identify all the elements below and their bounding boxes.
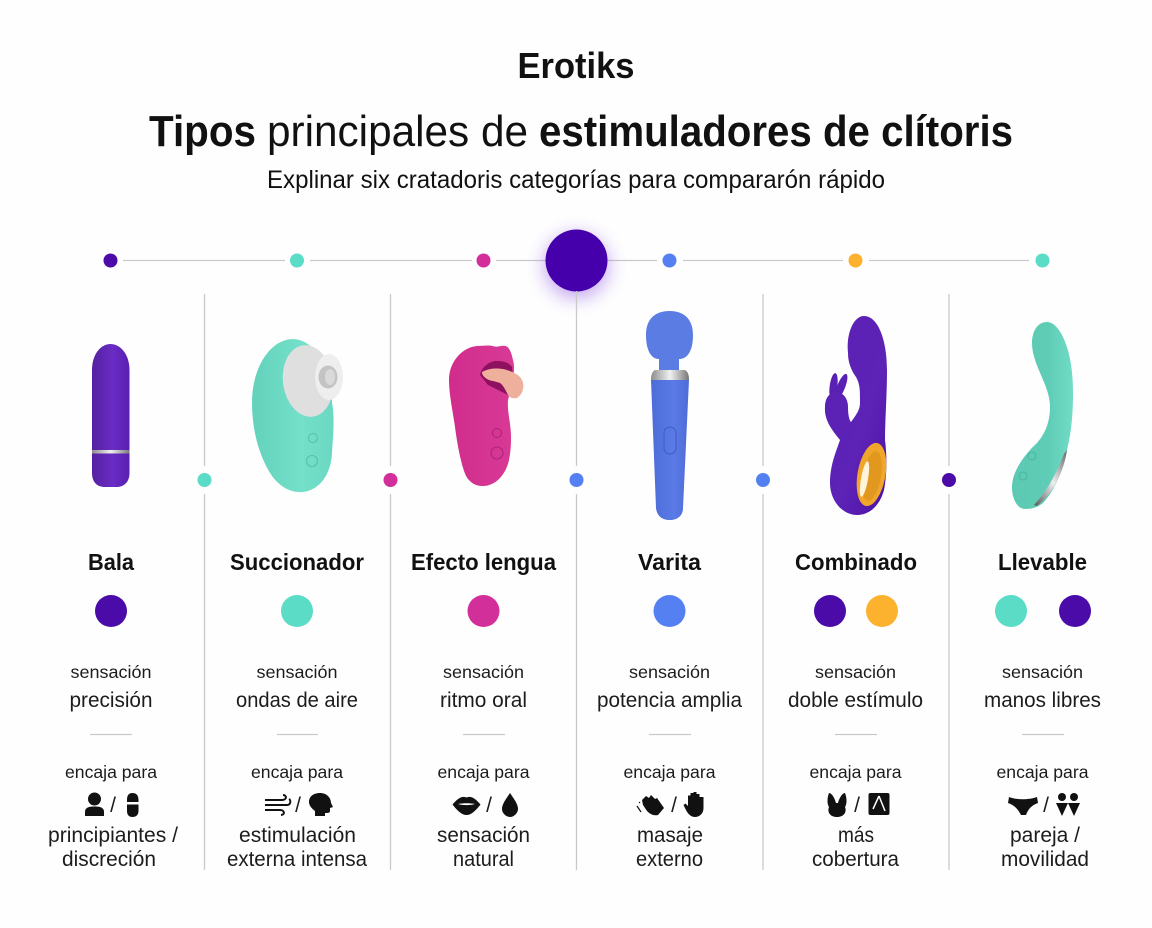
main heading: estimuladores de clítoris	[539, 107, 1013, 156]
main heading: principales de	[267, 107, 528, 156]
column dividers	[198, 291, 956, 870]
fit: más	[838, 824, 874, 847]
icon: underwear	[1008, 797, 1038, 815]
fit: discreción	[62, 848, 156, 871]
colour swatch	[468, 595, 500, 627]
fit: /	[1043, 794, 1049, 817]
product: wand	[646, 311, 693, 520]
column: Varita	[597, 549, 742, 871]
name: Combinado	[795, 549, 917, 575]
colour swatch	[654, 595, 686, 627]
icon: leaf	[502, 793, 518, 817]
fit	[227, 762, 367, 871]
sensation: precisión	[70, 689, 152, 712]
icon: bunny	[828, 793, 846, 817]
fit: principiantes /	[48, 824, 178, 847]
sensation: sensación	[70, 662, 152, 682]
fit: cobertura	[812, 848, 899, 871]
column: Bala	[48, 549, 178, 871]
fit: sensación	[437, 824, 530, 847]
sensation: manos libres	[984, 689, 1101, 712]
name: Efecto lengua	[411, 549, 557, 575]
fit: estimulación	[239, 824, 356, 847]
sensation: sensación	[443, 662, 524, 682]
icon: open hand	[684, 792, 704, 817]
fit: /	[110, 794, 116, 817]
fit: masaje	[637, 824, 703, 847]
fit: externo	[636, 848, 703, 871]
fit: encaja para	[996, 762, 1089, 782]
sensation	[597, 662, 742, 712]
fit	[624, 762, 716, 871]
product: bullet	[92, 344, 130, 487]
sensation	[236, 662, 358, 712]
colour swatch	[281, 595, 313, 627]
product: rabbit	[825, 316, 891, 515]
sensation	[440, 662, 527, 712]
column: Llevable	[984, 549, 1101, 871]
sensation	[788, 662, 923, 712]
fit	[996, 762, 1089, 871]
column: Succionador	[227, 549, 367, 871]
icon: bullet	[127, 793, 138, 817]
icon: square glyph	[868, 793, 890, 815]
colour swatches	[995, 595, 1091, 627]
icon: lips	[452, 797, 480, 815]
fit	[810, 762, 902, 871]
fit: natural	[453, 848, 514, 871]
active marker	[544, 230, 608, 298]
sensation	[984, 662, 1101, 712]
fit: /	[854, 794, 860, 817]
timeline	[104, 230, 1050, 298]
colour swatches	[814, 595, 898, 627]
fit: encaja para	[810, 762, 902, 782]
sensation: sensación	[629, 662, 710, 682]
fit: encaja para	[65, 762, 157, 782]
name: Bala	[88, 549, 135, 575]
fit: encaja para	[251, 762, 343, 782]
name: Succionador	[230, 549, 364, 575]
main heading	[149, 107, 1013, 156]
subtitle: Explinar six cratadoris categorías para compararón rápido	[267, 166, 885, 194]
icon: couple	[1056, 793, 1080, 816]
name: Varita	[638, 549, 702, 575]
fit: encaja para	[624, 762, 716, 782]
fit: encaja para	[438, 762, 530, 782]
column: Efecto lengua	[411, 549, 557, 871]
main heading: Tipos	[149, 107, 256, 156]
fit: externa intensa	[227, 848, 367, 871]
sensation: ritmo oral	[440, 689, 527, 712]
product: wearable	[1012, 322, 1073, 509]
fit: movilidad	[1001, 848, 1089, 871]
sensation: ondas de aire	[236, 689, 358, 712]
sensation: doble estímulo	[788, 689, 923, 712]
fit	[48, 762, 178, 871]
fit	[437, 762, 530, 871]
fit: /	[671, 794, 677, 817]
fit: /	[486, 794, 492, 817]
fit: /	[295, 794, 301, 817]
sensation	[70, 662, 152, 712]
icon: wind	[265, 795, 290, 815]
sensation: potencia amplia	[597, 689, 742, 712]
product: suction	[252, 339, 343, 492]
name: Llevable	[998, 549, 1087, 575]
column: Combinado	[788, 549, 923, 871]
sensation: sensación	[1002, 662, 1083, 682]
colour swatch	[95, 595, 127, 627]
icon: person	[85, 792, 104, 816]
sensation: sensación	[256, 662, 338, 682]
icon: waving hand	[637, 795, 664, 815]
sensation: sensación	[815, 662, 896, 682]
brand title: Erotiks	[518, 45, 634, 86]
icon: head	[309, 793, 333, 816]
fit: pareja /	[1010, 824, 1080, 847]
product: tongue	[449, 346, 523, 486]
